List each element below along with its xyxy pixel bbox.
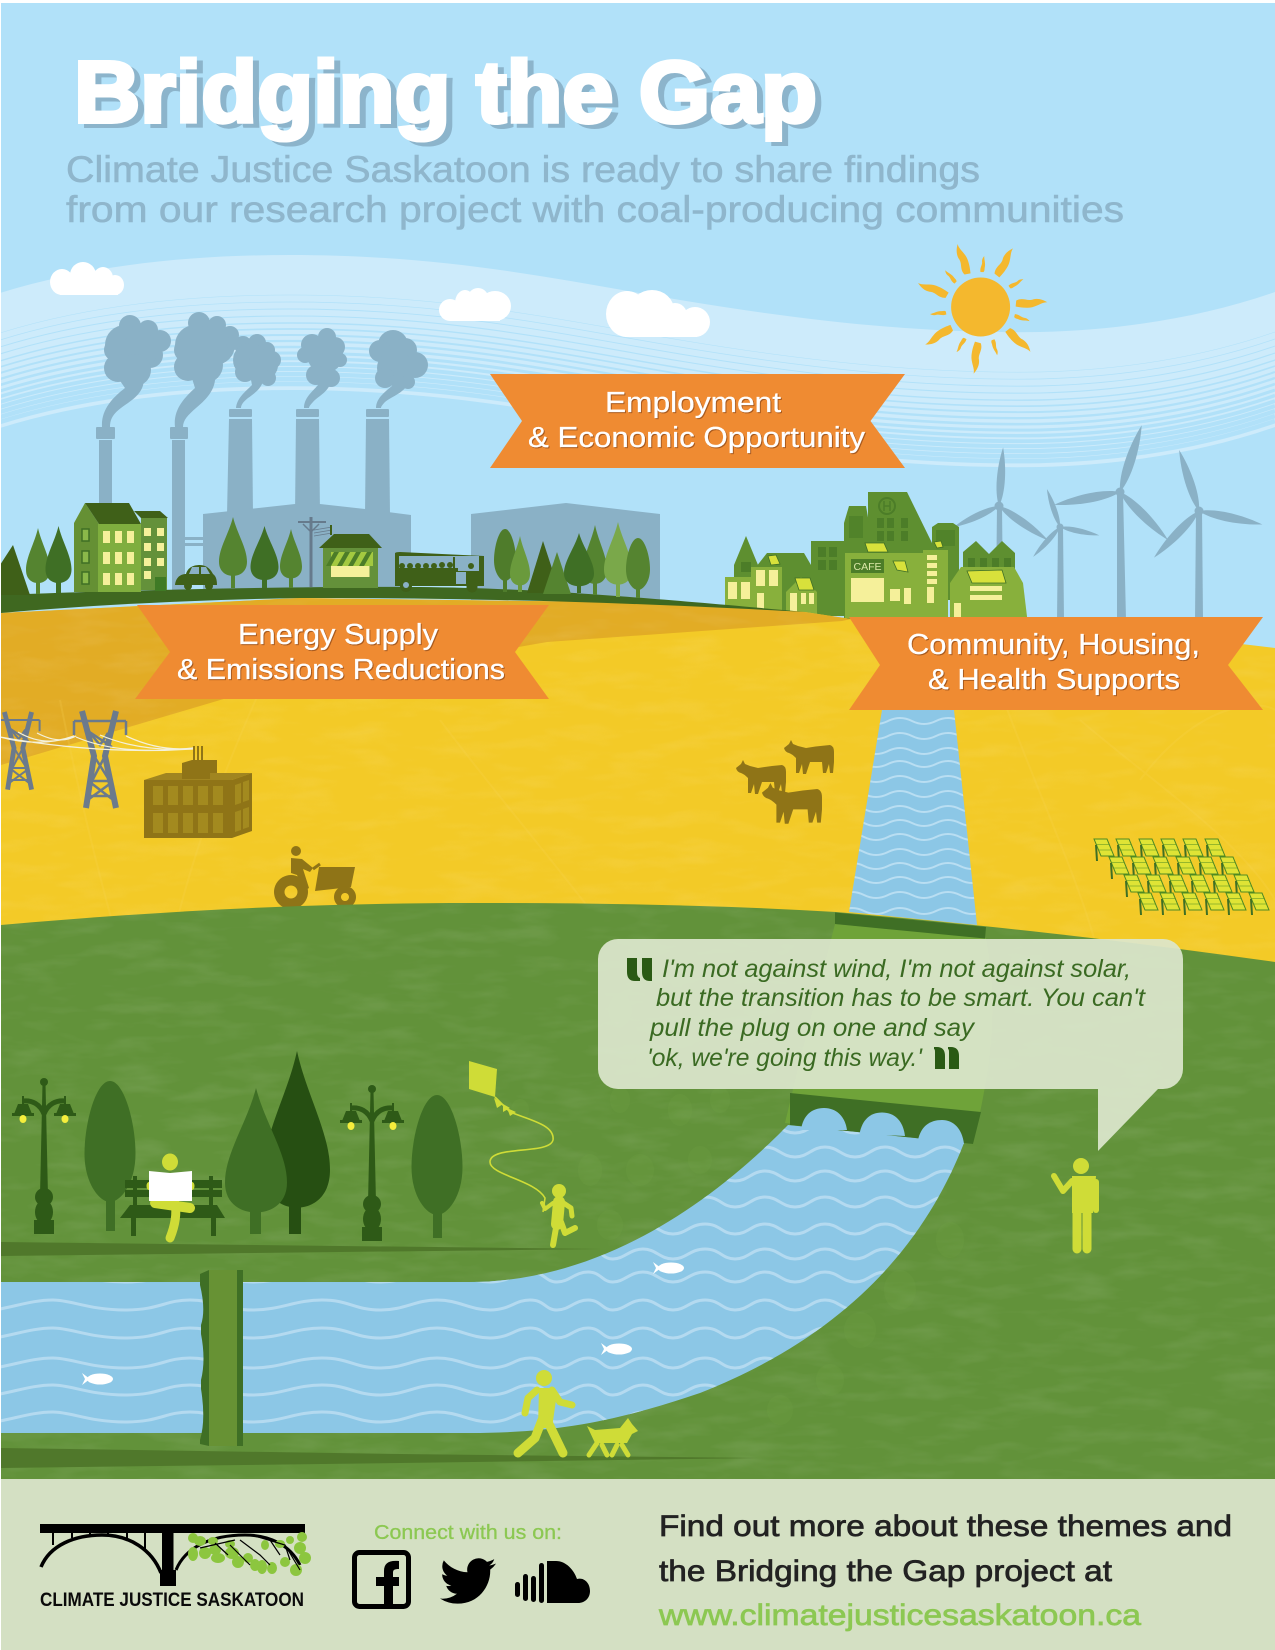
call to action text: Find out more about these themes and [659,1510,1232,1543]
child flying kite [542,1184,575,1245]
quote text: I'm not against wind, I'm not against solar, [662,955,1131,983]
logo: Climate Justice Saskatoon [40,1524,311,1611]
quote text: 'ok, we're going this way.' [647,1044,923,1072]
smoke plumes [102,312,428,427]
icon: twitter [440,1558,496,1604]
right tree group [494,522,650,598]
car [175,565,217,590]
front buildings [725,550,1028,625]
kite and string [469,1061,553,1212]
utility pole [298,517,332,587]
banner: energy supply: & Emissions Reductions [177,654,505,686]
opening quote mark [627,958,652,981]
icon: sun [916,243,1048,374]
solar panel array [1094,839,1269,915]
call to action text [658,1510,1232,1632]
wind turbines [952,424,1263,620]
quote text: but the transition has to be smart. You can't [656,984,1146,1012]
banner: employment: & Economic Opportunity [528,422,866,454]
icon: soundcloud [515,1561,590,1603]
banner: energy supply: Energy Supply [238,619,439,651]
top bridge deck [835,912,986,938]
hospital and tower windows [741,498,1011,572]
subtitle: from our research project with coal-producing communities [66,189,1124,230]
subtitle [66,149,1124,230]
left tree group [0,526,72,595]
call to action text: the Bridging the Gap project at [659,1555,1112,1588]
green town with cafe and solar roofs [725,492,1028,625]
social heading: Connect with us on: [374,1522,562,1544]
windows, cafe sign and solar panels [728,555,1002,617]
tractor with driver [274,846,356,909]
person walking [518,1370,572,1453]
yellow field [0,590,1275,980]
icon: facebook [354,1552,408,1607]
middle trees [219,517,302,588]
park bench [120,1176,225,1236]
sky background [1,3,1275,673]
field shading [1,598,851,765]
chimneys [96,409,390,590]
closing quote mark [934,1047,959,1069]
arched stone bridge [790,1093,981,1144]
horizon hill strip [1,587,805,613]
transmission pylons and wires [0,711,193,808]
logo wordmark: CLIMATE JUSTICE SASKATOON [40,1590,304,1611]
fish [82,1262,684,1385]
banner: community: Community, Housing, [907,629,1200,661]
subtitle: Climate Justice Saskatoon is ready to share findings [66,149,980,190]
person speaking [1054,1158,1096,1249]
bridge mark [40,1524,311,1586]
footpaths [1,1242,760,1468]
park: trees [84,1051,462,1238]
quote text: pull the plug on one and say [649,1014,976,1042]
banner: energy supply [135,605,549,699]
banner: employment [490,374,905,468]
page edge [0,0,1,1650]
dog [587,1418,638,1455]
park: lamp posts [12,1078,404,1241]
clouds [50,262,710,337]
shop with striped awning [319,525,382,588]
path between bridges [785,924,993,1144]
second plant building [471,503,660,600]
cows [736,740,834,824]
quote text [647,955,1146,1072]
apartment building [74,503,168,592]
speech bubble with quote [598,939,1183,1151]
green hill [0,900,1275,1480]
cafe sign: CAFE [853,561,882,573]
call to action text: www.climatejusticesaskatoon.ca [658,1599,1142,1632]
factory building [144,746,252,838]
footer panel [1,1479,1275,1650]
lower footbridge [200,1270,243,1446]
banner: employment: Employment [605,387,781,419]
back buildings [734,492,1015,620]
lower river with waves [0,1123,975,1433]
banner: community: & Health Supports [928,664,1180,696]
striped wind band in the sky [0,255,1275,467]
title: Bridging the Gap [74,44,817,141]
coal plant: smoke, chimneys and buildings [96,312,660,600]
banner: community [849,617,1263,710]
power plant building [203,504,411,595]
upper river stream [849,710,977,925]
bus [395,552,484,592]
person reading newspaper on bench [146,1154,194,1238]
